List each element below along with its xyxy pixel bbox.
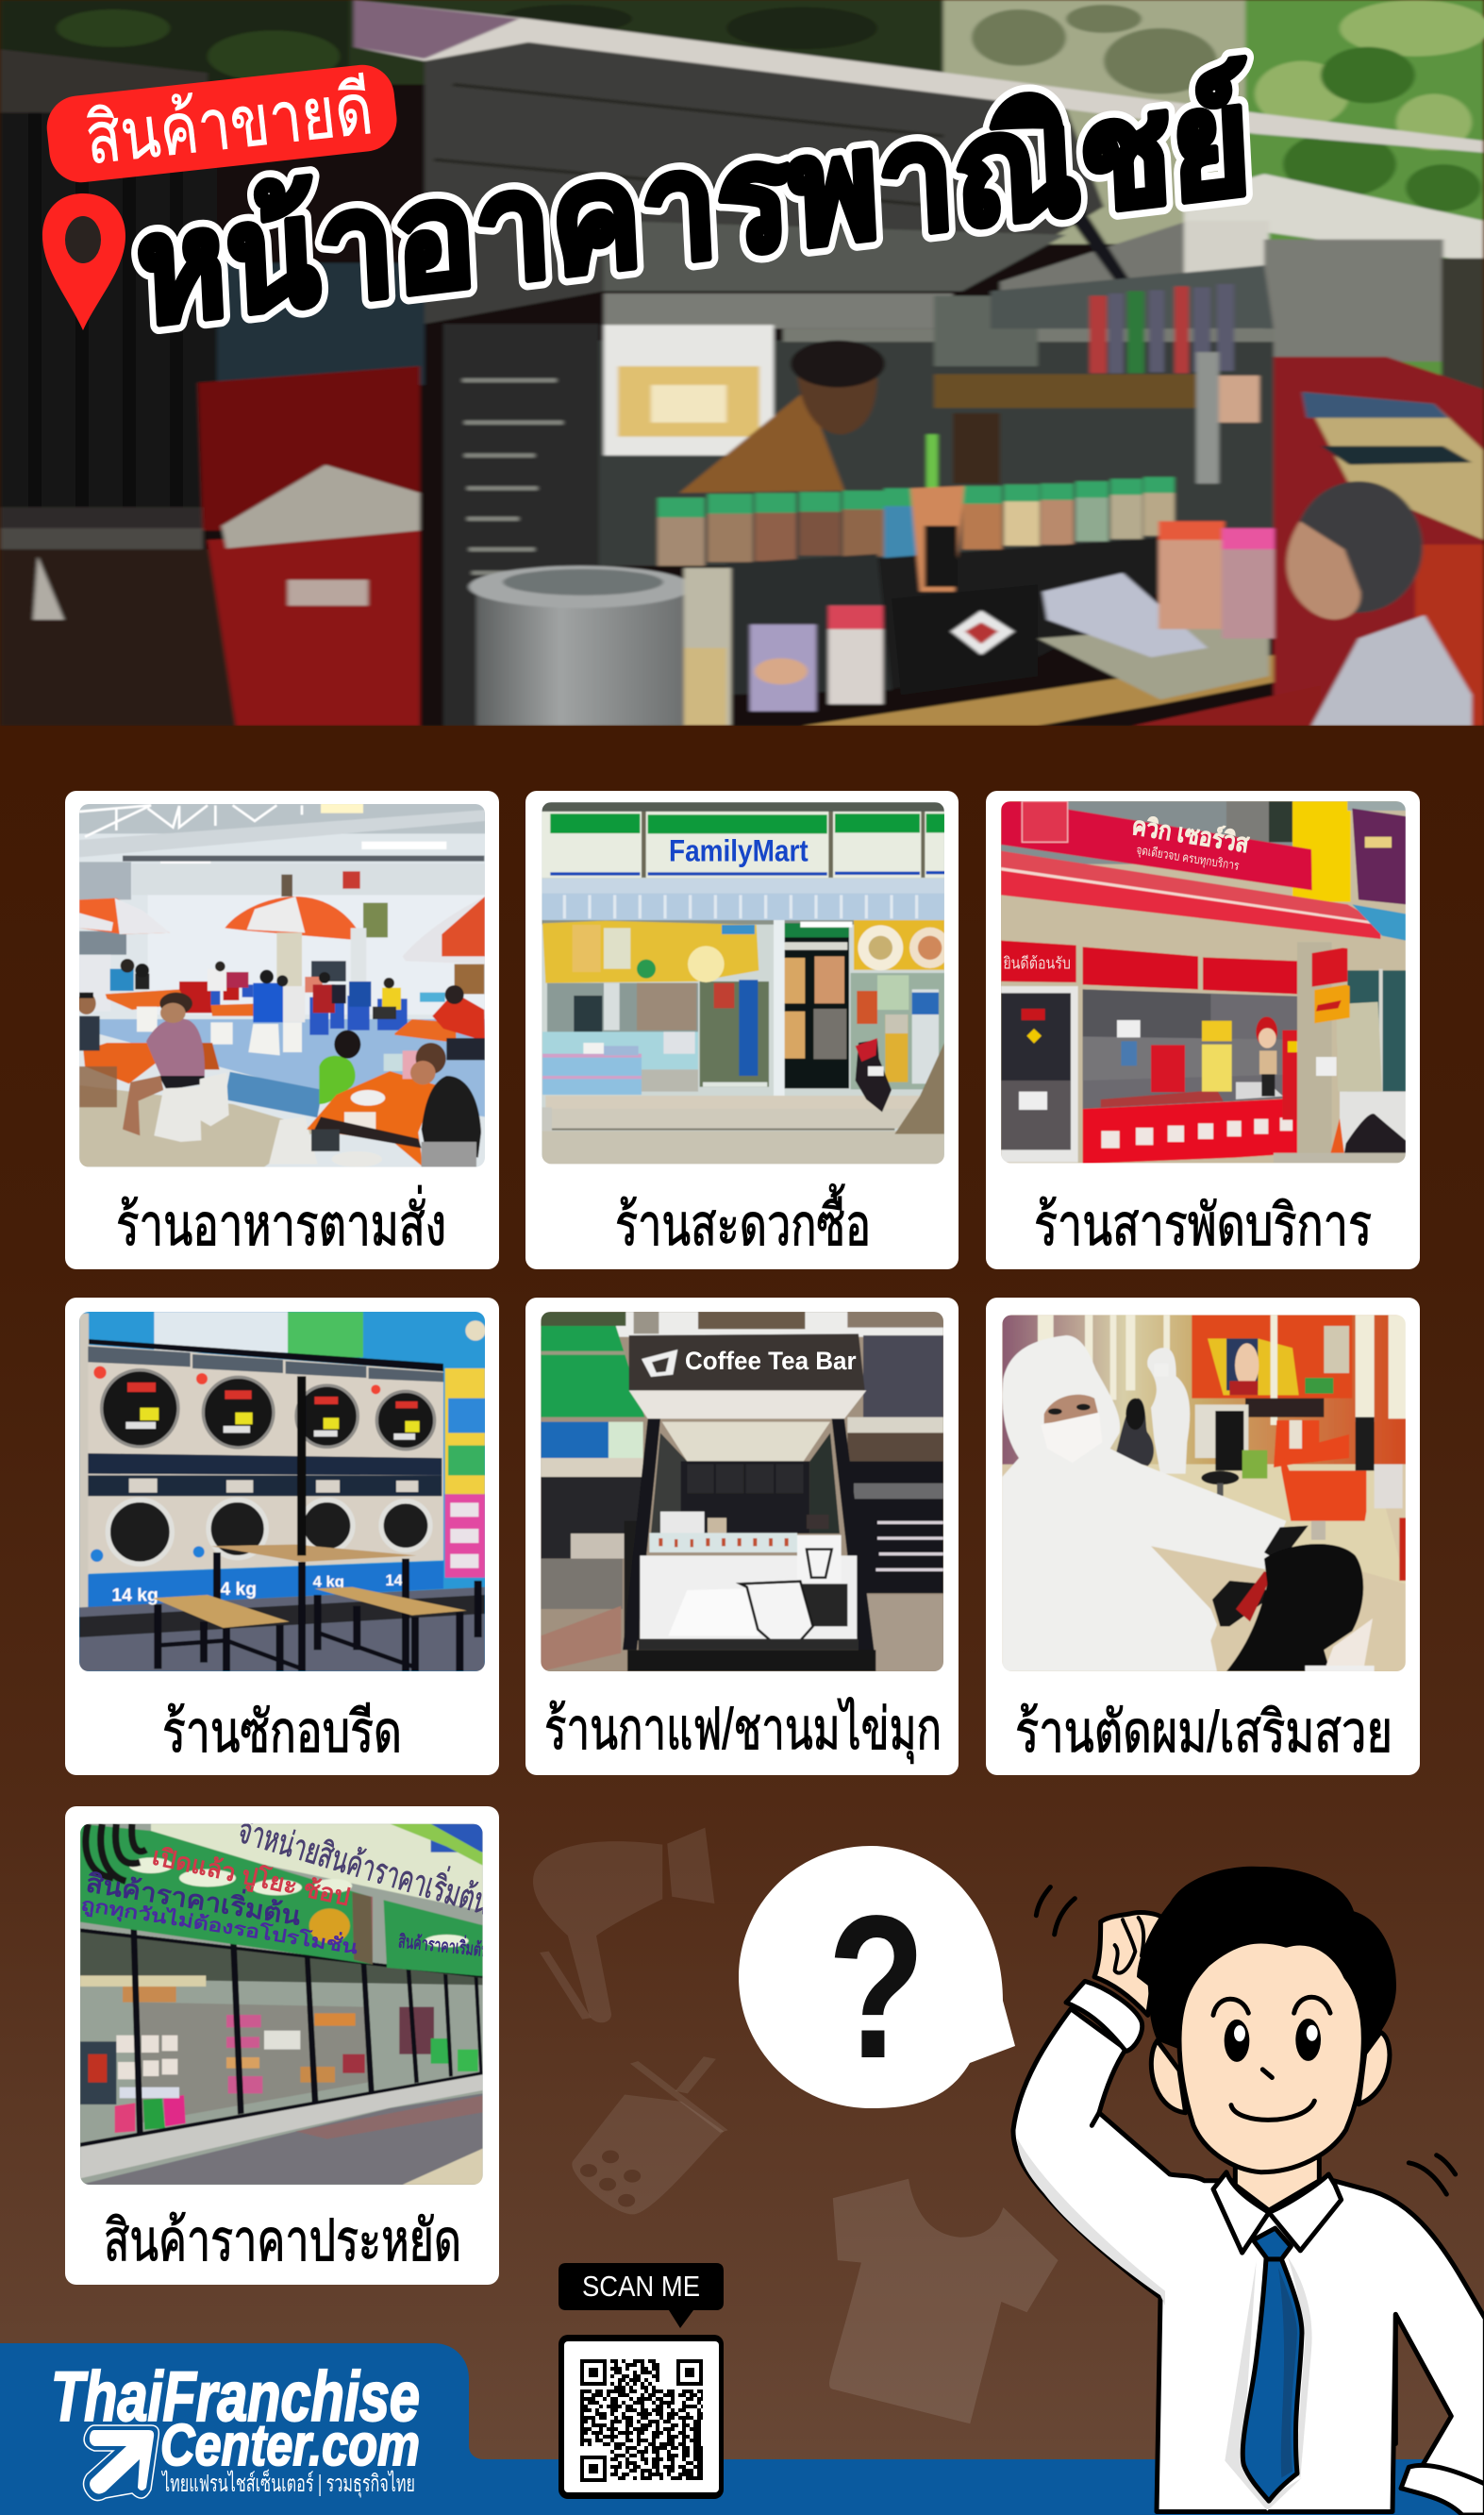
photo: laundromat: 4 kg	[313, 1573, 344, 1591]
photo: coffee tea bar kiosk: Coffee Tea Bar	[685, 1347, 857, 1375]
neck	[1235, 2157, 1319, 2210]
callout: scan me: SCAN ME	[582, 2270, 700, 2303]
photo: restaurant	[75, 802, 491, 1170]
photo: twenty-baht shop front	[80, 1823, 483, 2185]
photo: laundromat: 14 kg	[111, 1586, 158, 1606]
label: convenience store: ร้านสะดวกซื้อ	[615, 1183, 871, 1257]
card: coffee and bubble tea	[525, 1298, 959, 1775]
card: service shop	[986, 791, 1420, 1269]
ears	[1151, 2032, 1390, 2113]
hair	[1137, 1867, 1396, 2049]
label: coffee and bubble tea: ร้านกาแฟ/ชานมไข่มุก	[544, 1697, 942, 1764]
card: convenience store	[525, 791, 959, 1269]
label: service shop: ร้านสารพัดบริการ	[1034, 1193, 1372, 1257]
shirt	[1013, 2009, 1484, 2511]
photo: laundromat	[75, 1307, 491, 1675]
card: laundromat	[65, 1298, 499, 1775]
cuff	[1066, 1981, 1142, 2052]
card: made-to-order restaurant	[65, 791, 499, 1269]
speech bubble with question mark	[739, 1846, 1015, 2108]
callout: scan me	[559, 2263, 724, 2328]
photo: parcel service shop: ควิก เซอร์วิส	[1130, 812, 1252, 858]
photo: twenty-baht shop front: สินค้าราคาเริ่มต้น	[397, 1927, 491, 1961]
lower hand and cuff	[1401, 2465, 1484, 2515]
raised hand	[1094, 1913, 1162, 2015]
photo: twenty-baht shop front: เปิดแล้ว ปูโยะ ช้อป	[149, 1841, 353, 1913]
qr code	[559, 2335, 724, 2499]
tag: red pill "bestselling": สินค้าขายดี	[82, 69, 376, 179]
photo: FamilyMart storefront: FamilyMart	[669, 833, 809, 867]
necktie shading	[1278, 2268, 1297, 2477]
logo: ThaiFranchise Center: Center.com	[160, 2413, 420, 2478]
icon: t-shirt watermark	[829, 2179, 1059, 2423]
card: hair and beauty salon	[986, 1298, 1420, 1775]
necktie	[1242, 2228, 1302, 2501]
arm crease	[1092, 2113, 1395, 2443]
icon: bubble tea watermark	[572, 2057, 724, 2214]
face	[1179, 1941, 1363, 2172]
title: commercial building: หน้าอาคารพาณิชย์	[133, 56, 1254, 356]
motion lines	[1036, 1887, 1456, 2194]
photo: coffee tea bar kiosk	[533, 1307, 948, 1675]
card: budget goods store	[65, 1805, 499, 2285]
photo: laundromat: 14	[385, 1571, 404, 1589]
label: laundromat: ร้านซักอบรีด	[162, 1700, 402, 1764]
footer: blue ribbon with logo panel	[0, 2343, 1484, 2515]
label: made-to-order restaurant: ร้านอาหารตามสั่ง	[116, 1185, 446, 1257]
photo: twenty-baht shop front: สินค้าราคาเริ่มต้น	[84, 1864, 304, 1931]
character: puzzled businessman scratching his head	[1013, 1867, 1484, 2515]
header photo: drink cart on a truck	[0, 0, 1484, 726]
photo: FamilyMart storefront	[533, 797, 950, 1165]
shirt shading	[1017, 2138, 1312, 2511]
photo: parcel service shop	[991, 797, 1406, 1165]
eyes	[1225, 2019, 1321, 2062]
collar	[1213, 2172, 1342, 2253]
speech bubble with question mark: ?	[827, 1872, 925, 2101]
photo: salon staff in protective suit	[991, 1307, 1406, 1675]
logo: ThaiFranchise Center: ไทยแฟรนไชส์เซ็นเตอร์ | รวมธุรกิจไทย	[161, 2469, 415, 2498]
logo: ThaiFranchise Center: ThaiFranchise	[51, 2357, 420, 2436]
photo: parcel service shop: ยินดีต้อนรับ	[1003, 954, 1071, 973]
title: commercial building: หน้าอาคารพาณิชย์	[133, 56, 1254, 356]
label: budget goods store: สินค้าราคาประหยัด	[104, 2208, 461, 2272]
photo: twenty-baht shop front: ถูกทุกวันไม่ต้องรอโปรโมชั่น	[79, 1890, 360, 1959]
logo: ThaiFranchise Center	[51, 2357, 420, 2501]
icon: red location pin	[42, 193, 125, 330]
brows, nose and smile	[1213, 1997, 1330, 2120]
photo: parcel service shop: จุดเดียวจบ ครบทุกบริการ	[1135, 843, 1240, 874]
finger lines	[1115, 1918, 1143, 1973]
photo: laundromat: 4 kg	[220, 1580, 257, 1600]
page background	[0, 726, 1484, 2515]
icon: hair dryer watermark	[533, 1828, 714, 2022]
photo: twenty-baht shop front: จำหน่ายสินค้าราคาเริ่มต้น	[234, 1805, 496, 1922]
